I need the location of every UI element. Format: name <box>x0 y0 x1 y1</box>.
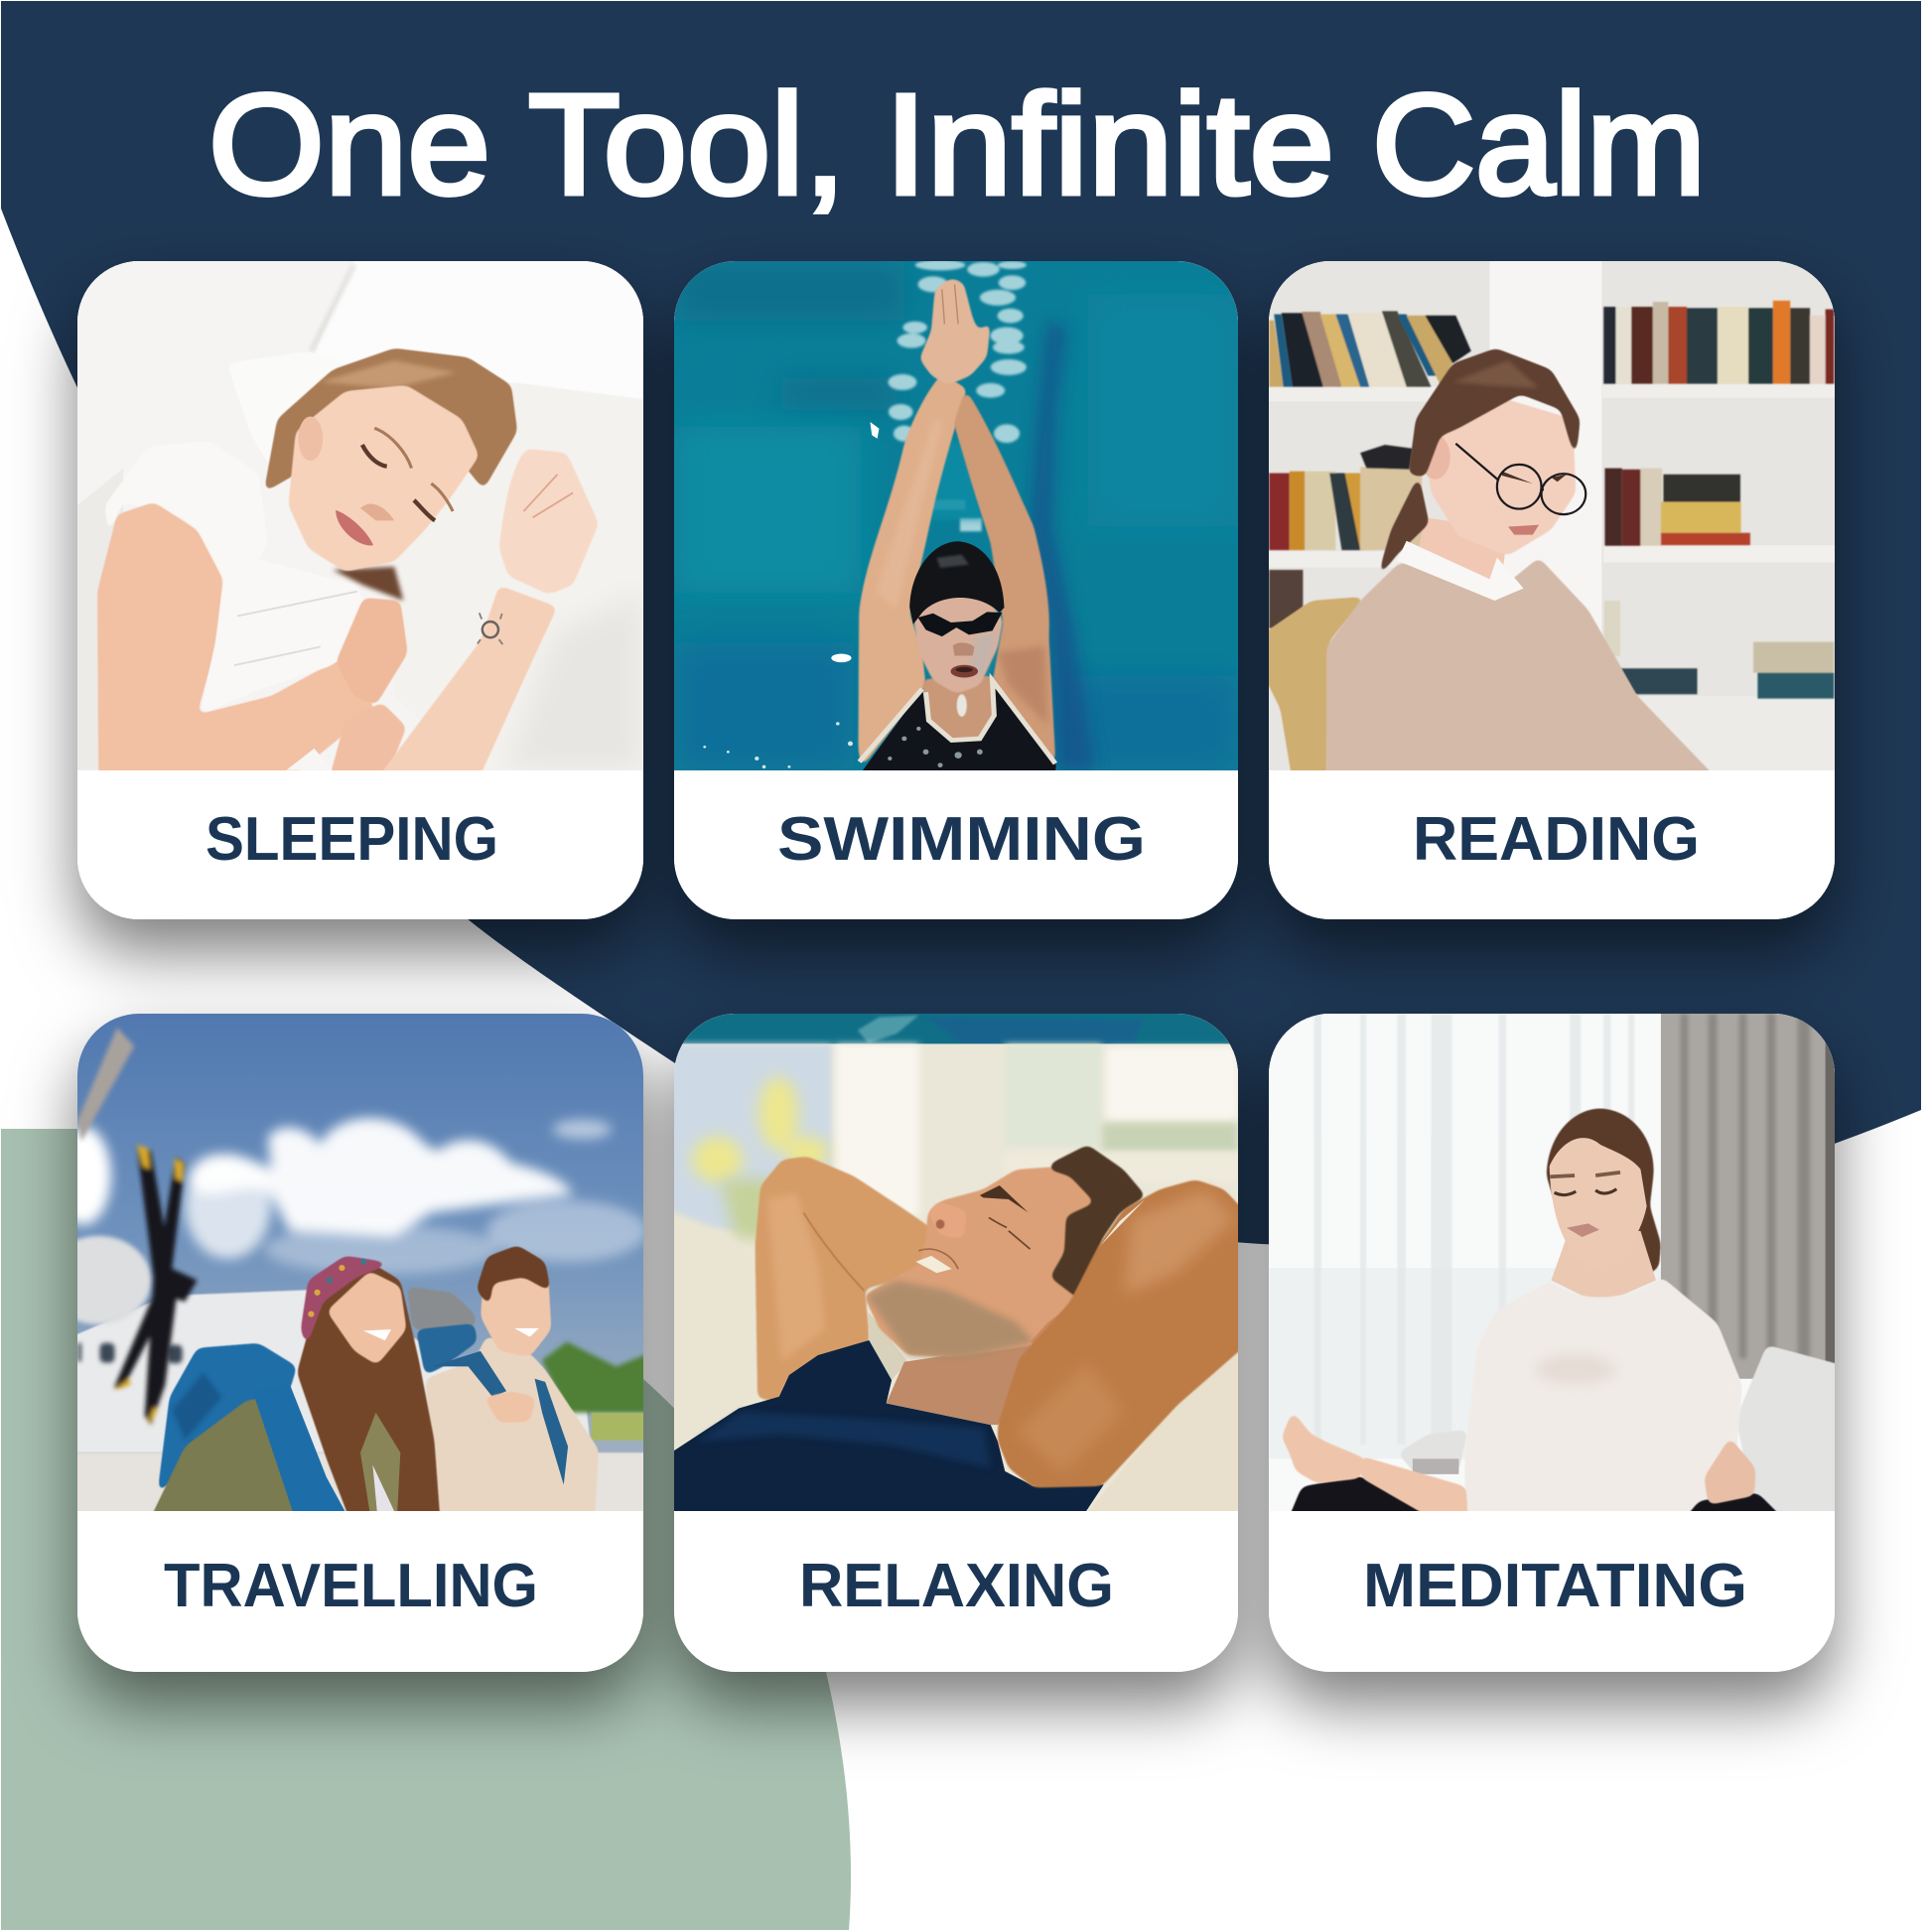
label: meditating: MEDITATING <box>1363 1552 1747 1620</box>
background: navy shape <box>1 1 1921 1245</box>
ground and trees <box>73 1452 647 1514</box>
sweater <box>1326 558 1721 782</box>
blurred window background <box>652 1043 1238 1229</box>
title: One <box>208 65 490 224</box>
cushion behind chin <box>869 1312 907 1382</box>
label: sleeping: SLEEPING <box>206 805 498 874</box>
right hand <box>1704 1438 1755 1505</box>
hair <box>1048 1145 1146 1301</box>
right arm and hand <box>383 588 556 770</box>
swimsuit <box>860 681 1056 775</box>
left forearm and hand <box>1360 1455 1468 1524</box>
left arm <box>97 502 376 782</box>
eyes and lips <box>1555 1189 1616 1195</box>
chair <box>1262 597 1366 782</box>
glasses <box>1455 444 1586 514</box>
face <box>1425 394 1576 556</box>
ear <box>1031 1308 1069 1347</box>
woman's strap <box>252 1384 345 1511</box>
face <box>1550 1138 1647 1268</box>
books middle right <box>1604 469 1622 546</box>
plane <box>73 1290 592 1452</box>
label: travelling: TRAVELLING <box>164 1552 538 1620</box>
right arm <box>954 389 1056 768</box>
woman's jacket <box>148 1394 321 1524</box>
background: sage shape <box>1 1129 851 1930</box>
hair <box>1409 348 1581 478</box>
photo: woman sleeping on pillows <box>73 259 653 788</box>
t-shirt <box>670 1340 1104 1514</box>
woman's face <box>327 1271 407 1365</box>
photo: backpackers at airfield <box>47 1009 647 1524</box>
photo: woman meditating by the window <box>1265 1009 1847 1524</box>
sweater <box>1465 1277 1742 1524</box>
plane wing <box>77 1028 134 1142</box>
card: reading <box>1262 259 1838 919</box>
swimming cap <box>909 541 1004 624</box>
card: sleeping <box>73 259 653 919</box>
photo: girl reading in front of bookshelves <box>1262 259 1838 782</box>
left arm <box>858 374 967 768</box>
books top left <box>1269 301 1834 699</box>
books top right <box>1603 307 1616 384</box>
woman's hair <box>297 1262 441 1524</box>
neck <box>1419 517 1508 582</box>
card base: relaxing <box>674 1014 1238 1672</box>
card: travelling <box>47 1009 647 1672</box>
label: relaxing: RELAXING <box>799 1552 1114 1620</box>
man's straps and hand <box>431 1351 568 1484</box>
neck <box>1551 1231 1656 1305</box>
title <box>208 65 1706 224</box>
woman's beanie <box>301 1256 392 1348</box>
face <box>913 595 1003 694</box>
face <box>864 1167 1098 1357</box>
card base: sleeping <box>77 261 643 919</box>
neck <box>887 1342 1055 1425</box>
ponytail <box>1376 475 1430 582</box>
chest <box>922 675 998 742</box>
hands <box>919 278 991 385</box>
clouds <box>56 1118 647 1274</box>
photo: man relaxing on sofa <box>652 1011 1246 1515</box>
sofa <box>667 1209 760 1454</box>
pillow <box>1736 1345 1847 1524</box>
card base: reading <box>1269 261 1835 919</box>
card base: meditating <box>1269 1014 1835 1672</box>
raised arm <box>755 1157 933 1402</box>
grey curtain <box>1661 1009 1837 1379</box>
nose <box>927 1201 967 1239</box>
lower arm <box>331 704 405 770</box>
books middle left <box>1269 474 1290 550</box>
brow and eye <box>980 1185 1029 1212</box>
goggles <box>918 612 1002 636</box>
sofa arm <box>1397 1430 1468 1474</box>
card shadows <box>77 261 1835 1672</box>
legs <box>1287 1476 1788 1524</box>
propeller <box>114 1145 198 1425</box>
jacket front and white top <box>360 1413 400 1511</box>
label: swimming: SWIMMING <box>777 805 1146 874</box>
smile <box>915 1256 952 1273</box>
card: relaxing <box>652 1011 1246 1672</box>
title: Calm <box>1372 65 1706 224</box>
card: swimming <box>670 258 1242 919</box>
card base: swimming <box>674 261 1238 919</box>
face <box>288 385 480 572</box>
hair <box>264 348 517 492</box>
t-shirt <box>105 481 123 525</box>
card base: travelling <box>77 1014 643 1672</box>
forearm behind head <box>998 1179 1246 1488</box>
title: Infinite <box>885 65 1334 224</box>
hugged pillow <box>208 585 353 676</box>
title: Tool, <box>528 65 846 224</box>
photo: swimmer in pool <box>670 258 1242 778</box>
books lower <box>1753 642 1834 673</box>
pool sparkles <box>889 260 1027 531</box>
man's sweater <box>425 1335 599 1524</box>
collar <box>1397 541 1524 601</box>
man's head <box>481 1274 551 1357</box>
hair back and ponytail <box>1547 1108 1661 1277</box>
stubble <box>867 1281 1034 1358</box>
card: meditating <box>1265 1009 1847 1672</box>
blurred flowers <box>692 1076 829 1182</box>
label: reading: READING <box>1413 805 1700 874</box>
blue backpack <box>157 1343 297 1496</box>
backpack man <box>407 1287 478 1335</box>
shelves <box>1269 387 1491 402</box>
hand <box>336 598 408 705</box>
